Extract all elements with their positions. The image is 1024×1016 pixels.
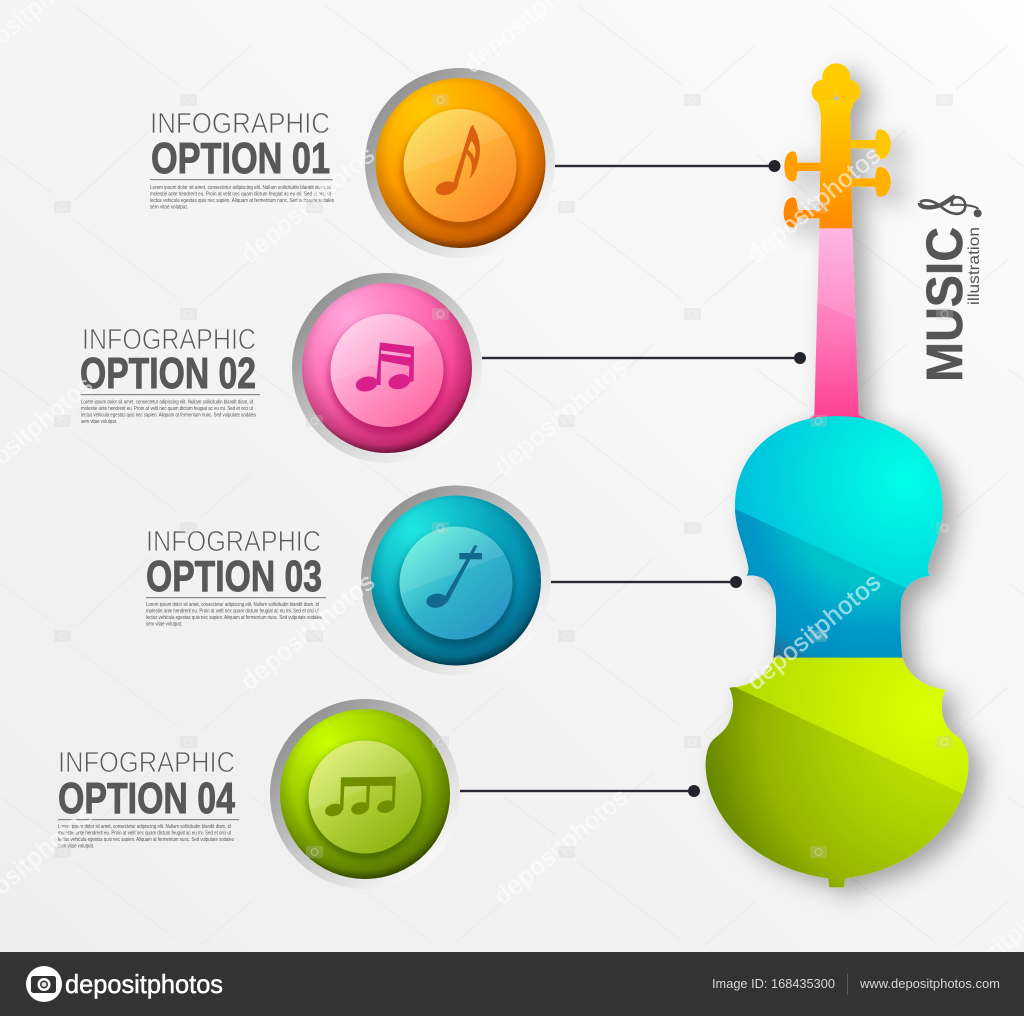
violin neck [807, 228, 870, 421]
text block: option 02 description [81, 400, 256, 425]
connector line 3 [551, 576, 742, 588]
text block: option 02 description: sem vitae volutpat. [81, 419, 117, 425]
text block: option 03 description: molestie ante hendrerit eu. Proin at velit nec quam dictum feugiat ac eu mi. Sed et orci ut [146, 608, 319, 614]
heading: infographic option 04: OPTION 04 [58, 774, 235, 823]
text block: option 01 description: molestie ante hendrerit eu. Proin at velit nec quam dictum feugiat ac eu mi. Sed et orci ut [150, 192, 331, 198]
icon: pink note button [292, 273, 482, 463]
text block: option 01 description [150, 185, 334, 210]
heading: infographic option 02: OPTION 02 [80, 349, 256, 398]
text block: option 01 description: Lorem ipsum dolor sit amet, consectetur adipiscing elit. Nullam sollicitudin blandit diam, id [150, 185, 331, 191]
text block: option 02 description: molestie ante hendrerit eu. Proin at velit nec quam dictum feugiat ac eu mi. Sed et orci ut [81, 406, 253, 412]
footer image id: Image ID: 168435300 [712, 976, 835, 991]
footer bar [0, 952, 1024, 1016]
connector line 2 [482, 352, 806, 364]
icon: depositphotos logo [26, 966, 62, 1002]
connector line 4 [460, 785, 700, 797]
text block: option 01 description: lectus vehicula egestas quis nec sapien. Aliquam at fermentum nunc. Sed vulputate sodales [150, 198, 334, 204]
heading: infographic option 03: OPTION 03 [146, 552, 322, 601]
footer brand name: depositphotos [65, 969, 223, 999]
text block: option 04 description: Lorem ipsum dolor sit amet, consectetur adipiscing elit. Nullam sollicitudin blandit diam, id [58, 824, 231, 830]
title: music illustration: MUSIC [916, 227, 973, 382]
text block: option 04 description: molestie ante hendrerit eu. Proin at velit nec quam dictum feugiat ac eu mi. Sed et orci ut [58, 830, 231, 836]
watermarks: depositphotos [236, 141, 380, 269]
title: music illustration: illustration [966, 227, 983, 305]
violin scroll and pegs [784, 63, 891, 228]
text block: option 03 description: sem vitae volutpat. [146, 622, 182, 628]
text block: option 04 description: lectus vehicula egestas quis nec sapien. Aliquam at fermentum nunc. Sed vulputate sodales [58, 837, 234, 843]
icon: treble clef [920, 196, 982, 217]
violin lower body [706, 658, 968, 887]
watermarks: depositphotos [236, 568, 380, 696]
heading: infographic option 01: OPTION 01 [151, 134, 330, 183]
panel: option 01 [150, 68, 780, 258]
text block: option 04 description: sem vitae volutpat. [58, 844, 94, 850]
text block: option 03 description [146, 602, 322, 628]
watermarks: depositphotos [742, 141, 886, 269]
text block: option 04 description [58, 824, 234, 850]
heading: infographic option 02: INFOGRAPHIC [82, 324, 256, 356]
heading: infographic option 03 [146, 526, 326, 601]
text block: option 03 description: Lorem ipsum dolor sit amet, consectetur adipiscing elit. Nullam sollicitudin blandit diam, id [146, 602, 319, 608]
watermarks: depositphotos [489, 353, 633, 481]
panel: option 04 [58, 699, 700, 889]
panel: option 02 [80, 273, 806, 463]
heading: infographic option 04: INFOGRAPHIC [58, 747, 235, 779]
watermarks: depositphotos [489, 783, 633, 911]
footer website: www.depositphotos.com [859, 976, 1000, 991]
violin [706, 63, 968, 887]
violin upper body [735, 416, 943, 658]
watermarks: depositphotos [742, 568, 886, 696]
text block: option 01 description: sem vitae volutpat. [150, 204, 188, 210]
panel: option 03 [146, 486, 742, 676]
icon: orange note button [365, 68, 555, 258]
heading: infographic option 01: INFOGRAPHIC [150, 108, 330, 140]
text block: option 03 description: lectus vehicula egestas quis nec sapien. Aliquam at fermentum nunc. Sed vulputate sodales [146, 615, 322, 621]
heading: infographic option 03: INFOGRAPHIC [146, 526, 321, 558]
text block: option 02 description: lectus vehicula egestas quis nec sapien. Aliquam at fermentum nunc. Sed vulputate sodales [81, 412, 256, 418]
connector line 1 [555, 160, 780, 172]
heading: infographic option 04 [58, 747, 239, 823]
heading: infographic option 01 [150, 108, 333, 183]
icon: green note button [270, 699, 460, 889]
heading: infographic option 02 [80, 324, 260, 398]
text block: option 02 description: Lorem ipsum dolor sit amet, consectetur adipiscing elit. Nullam sollicitudin blandit diam, id [81, 400, 253, 406]
icon: blue note button [361, 486, 551, 676]
